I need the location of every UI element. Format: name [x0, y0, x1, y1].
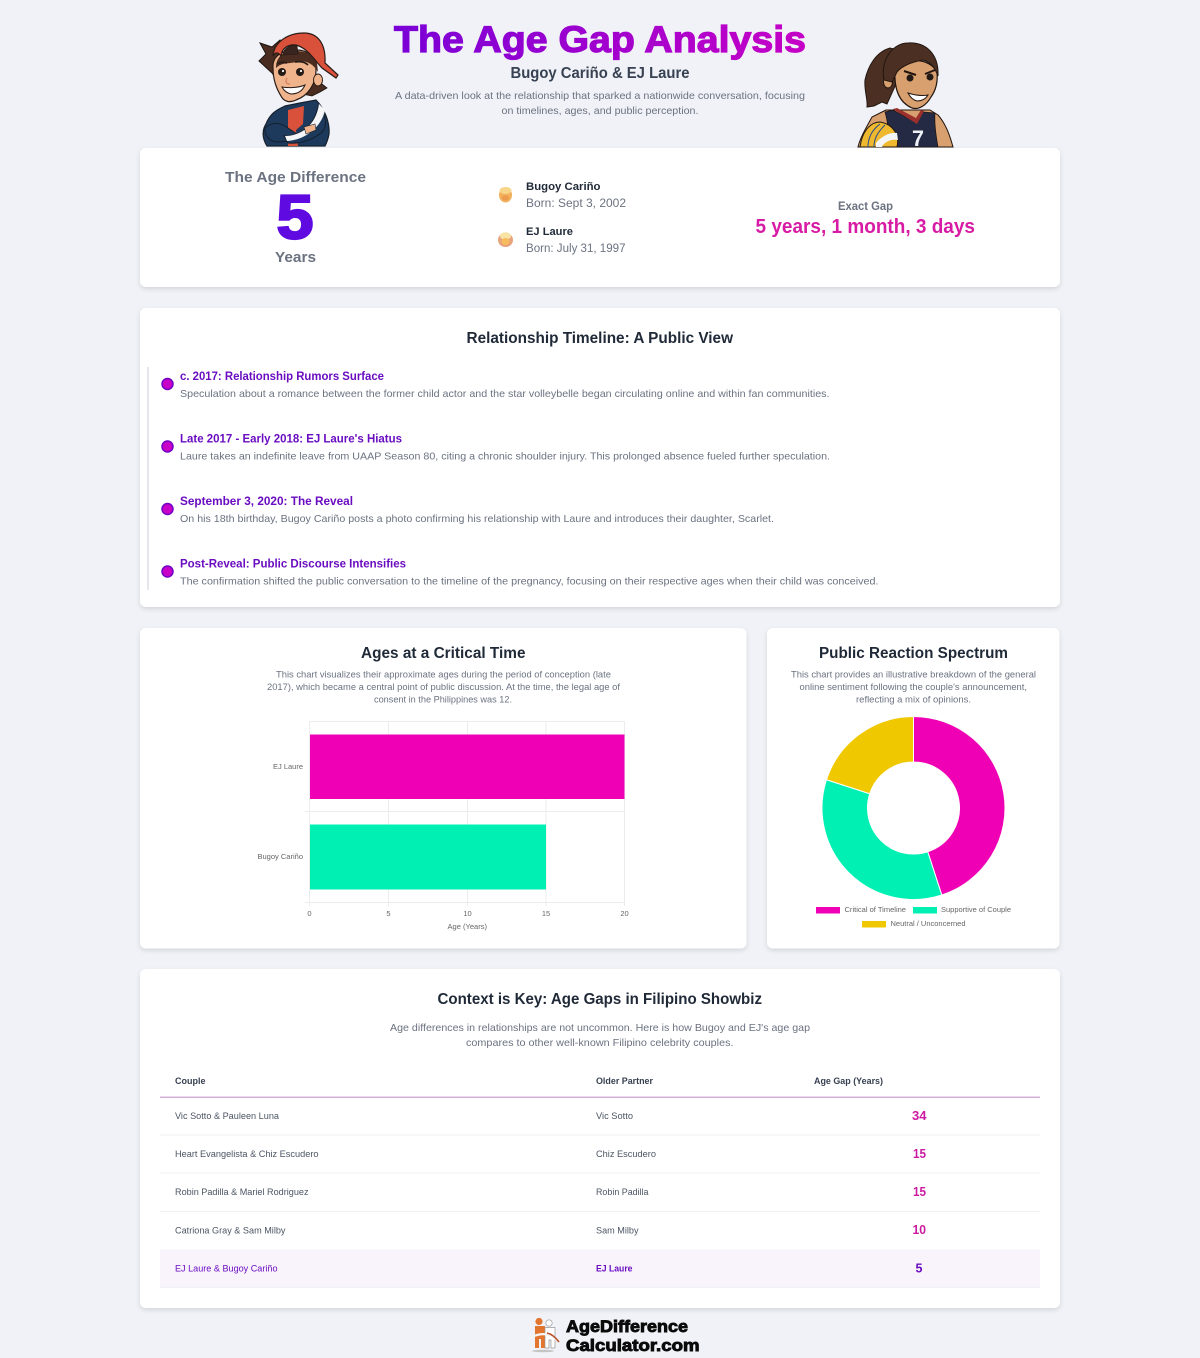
logo wordmark — [566, 1317, 700, 1355]
panel: public reaction spectrum — [767, 628, 1060, 948]
crossed arms — [265, 124, 300, 142]
panel: relationship timeline — [140, 308, 1060, 607]
donut description — [791, 670, 1036, 704]
jersey number: 7 — [912, 126, 924, 151]
illustration: Bugoy cartoon character — [259, 33, 338, 146]
table row: EJ Laure highlighted: 5 — [916, 1262, 922, 1276]
bar chart: ages: Age (Years) — [448, 922, 488, 931]
big number: age difference: 5 — [276, 184, 314, 252]
donut description: reflecting a mix of opinions. — [856, 694, 971, 704]
timeline event: hiatus: Late 2017 - Early 2018: EJ Laure's Hiatus — [180, 434, 402, 446]
table header: Age Gap (Years) — [814, 1076, 883, 1086]
table row: Catriona Gray: Sam Milby — [596, 1226, 639, 1236]
timeline event: discourse — [162, 558, 878, 588]
context description: compares to other well-known Filipino celebrity couples. — [466, 1037, 734, 1049]
logo wordmark: Calculator.com — [566, 1336, 700, 1355]
timeline event: discourse: The confirmation shifted the public conversation to the timeline of the pregnancy, focusing on their respective ages when their child was conceived. — [180, 576, 878, 588]
timeline event: reveal: September 3, 2020: The Reveal — [180, 496, 353, 508]
donut legend: Supportive of Couple — [941, 905, 1011, 914]
jersey — [885, 110, 938, 147]
arms — [858, 110, 953, 147]
hair top — [883, 43, 938, 82]
illustration: EJ Laure cartoon character — [858, 43, 953, 151]
table row: Robin Padilla — [160, 1185, 1040, 1212]
birth info: EJ: EJ Laure — [526, 226, 573, 238]
donut description: online sentiment following the couple's announcement, — [800, 682, 1027, 692]
bar: EJ Laure — [310, 734, 624, 799]
bar chart: ages: 0 — [307, 909, 312, 918]
bar chart: ages: 10 — [463, 909, 472, 918]
exact gap: Exact Gap — [838, 201, 893, 213]
donut description: This chart provides an illustrative breakdown of the general — [791, 670, 1036, 680]
chart description: consent in the Philippines was 12. — [374, 694, 512, 704]
cap — [273, 33, 338, 78]
table row: Catriona Gray: 10 — [912, 1223, 926, 1237]
table header — [160, 1076, 1040, 1098]
bar chart: ages: 5 — [386, 909, 391, 918]
table row: EJ Laure highlighted — [160, 1250, 1040, 1288]
panel: ages at a critical time — [140, 628, 746, 948]
bar chart: ages — [258, 722, 629, 931]
timeline event: reveal: On his 18th birthday, Bugoy Cariño posts a photo confirming his relationship with Laure and introduces their daughter, Scarlet. — [180, 513, 774, 525]
icon: EJ emoji — [498, 232, 513, 247]
big number: age difference: The Age Difference — [225, 169, 366, 186]
face — [273, 50, 316, 102]
chart description: This chart visualizes their approximate ages during the period of conception (late — [276, 670, 611, 680]
intro text: on timelines, ages, and public perception. — [502, 105, 698, 117]
big number: age difference — [225, 169, 366, 266]
subtitle: Bugoy Cariño & EJ Laure — [510, 65, 690, 82]
bar chart: ages: 20 — [620, 909, 629, 918]
donut chart: sentiment — [822, 716, 1005, 899]
bar chart: ages: 15 — [542, 909, 550, 918]
table row: Vic Sotto: Vic Sotto — [596, 1111, 633, 1121]
table row: EJ Laure highlighted: EJ Laure — [596, 1264, 632, 1274]
title: The Age Gap Analysis — [394, 19, 806, 60]
table header: Older Partner — [596, 1076, 653, 1086]
fringe — [276, 50, 318, 72]
logo wordmark: AgeDifference — [566, 1317, 688, 1336]
donut legend: Neutral / Unconcerned — [890, 919, 966, 928]
bar: Bugoy Cariño — [310, 824, 546, 890]
jacket — [263, 100, 329, 146]
table row: Catriona Gray: Catriona Gray & Sam Milby — [175, 1226, 286, 1236]
exact gap: 5 years, 1 month, 3 days — [756, 216, 975, 238]
chart description: 2017), which became a central point of public discussion. At the time, the legal age of — [267, 682, 621, 692]
bar chart: ages: Bugoy Cariño — [258, 852, 303, 861]
table row: Catriona Gray — [175, 1223, 926, 1237]
context description: Age differences in relationships are not uncommon. Here is how Bugoy and EJ's age gap — [390, 1022, 810, 1034]
table row: Vic Sotto: Vic Sotto & Pauleen Luna — [175, 1111, 279, 1121]
table: age gaps — [160, 1076, 1040, 1288]
table row: Heart Evangelista: 15 — [913, 1147, 926, 1161]
big number: age difference: Years — [275, 250, 316, 266]
icon: Bugoy emoji — [499, 187, 512, 202]
table header: Couple — [175, 1076, 206, 1086]
intro text: A data-driven look at the relationship that sparked a nationwide conversation, focusing — [395, 90, 805, 102]
volleyball — [860, 122, 898, 147]
timeline event: hiatus — [162, 434, 830, 462]
table row: Robin Padilla: 15 — [913, 1185, 926, 1199]
ponytail — [865, 48, 898, 107]
eyes and smile — [278, 68, 286, 76]
table row: Heart Evangelista: Chiz Escudero — [596, 1149, 656, 1159]
panel: context table — [140, 969, 1060, 1308]
table row: Vic Sotto — [160, 1109, 1040, 1136]
table row: Vic Sotto: 34 — [912, 1109, 927, 1123]
hair tufts — [259, 40, 286, 84]
shirt — [288, 106, 304, 146]
birth info: EJ: Born: July 31, 1997 — [526, 243, 626, 255]
chart description — [267, 670, 621, 704]
birth info: Bugoy — [526, 181, 626, 210]
bar chart: ages: EJ Laure — [273, 762, 303, 771]
timeline event: reveal — [162, 496, 774, 525]
intro text — [395, 90, 805, 117]
table row: Robin Padilla: Robin Padilla — [596, 1187, 648, 1197]
eyes and smile — [906, 74, 914, 82]
context description — [390, 1022, 810, 1049]
table row: Heart Evangelista: Heart Evangelista & Chiz Escudero — [175, 1149, 318, 1159]
timeline heading: Relationship Timeline: A Public View — [466, 330, 734, 347]
panel: age difference summary — [140, 148, 1060, 287]
birth info: Bugoy: Born: Sept 3, 2002 — [526, 198, 626, 210]
birth info: Bugoy: Bugoy Cariño — [526, 181, 601, 193]
table row: Robin Padilla: Robin Padilla & Mariel Rodriguez — [175, 1187, 309, 1197]
icon: two people logo — [529, 1318, 559, 1352]
neck and face — [895, 60, 937, 109]
donut legend — [816, 905, 1011, 928]
timeline event: hiatus: Laure takes an indefinite leave from UAAP Season 80, citing a chronic shoulder injury. This prolonged absence fueled further speculation. — [180, 450, 830, 462]
exact gap — [756, 201, 975, 238]
donut legend: Critical of Timeline — [844, 905, 906, 914]
timeline event: discourse: Post-Reveal: Public Discourse Intensifies — [180, 558, 406, 570]
donut heading: Public Reaction Spectrum — [819, 645, 1008, 662]
chart heading: Ages at a Critical Time — [361, 645, 526, 662]
timeline event: rumors: c. 2017: Relationship Rumors Surface — [180, 371, 384, 383]
context heading: Context is Key: Age Gaps in Filipino Showbiz — [438, 991, 762, 1008]
timeline event: rumors: Speculation about a romance between the former child actor and the star volleybelle began circulating online and within fan communities. — [180, 388, 830, 400]
timeline event: rumors — [162, 371, 830, 400]
birth info: EJ — [526, 226, 626, 255]
table row: Heart Evangelista — [160, 1147, 1040, 1174]
table row: EJ Laure highlighted: EJ Laure & Bugoy Cariño — [175, 1264, 278, 1274]
footer logo — [529, 1317, 700, 1355]
